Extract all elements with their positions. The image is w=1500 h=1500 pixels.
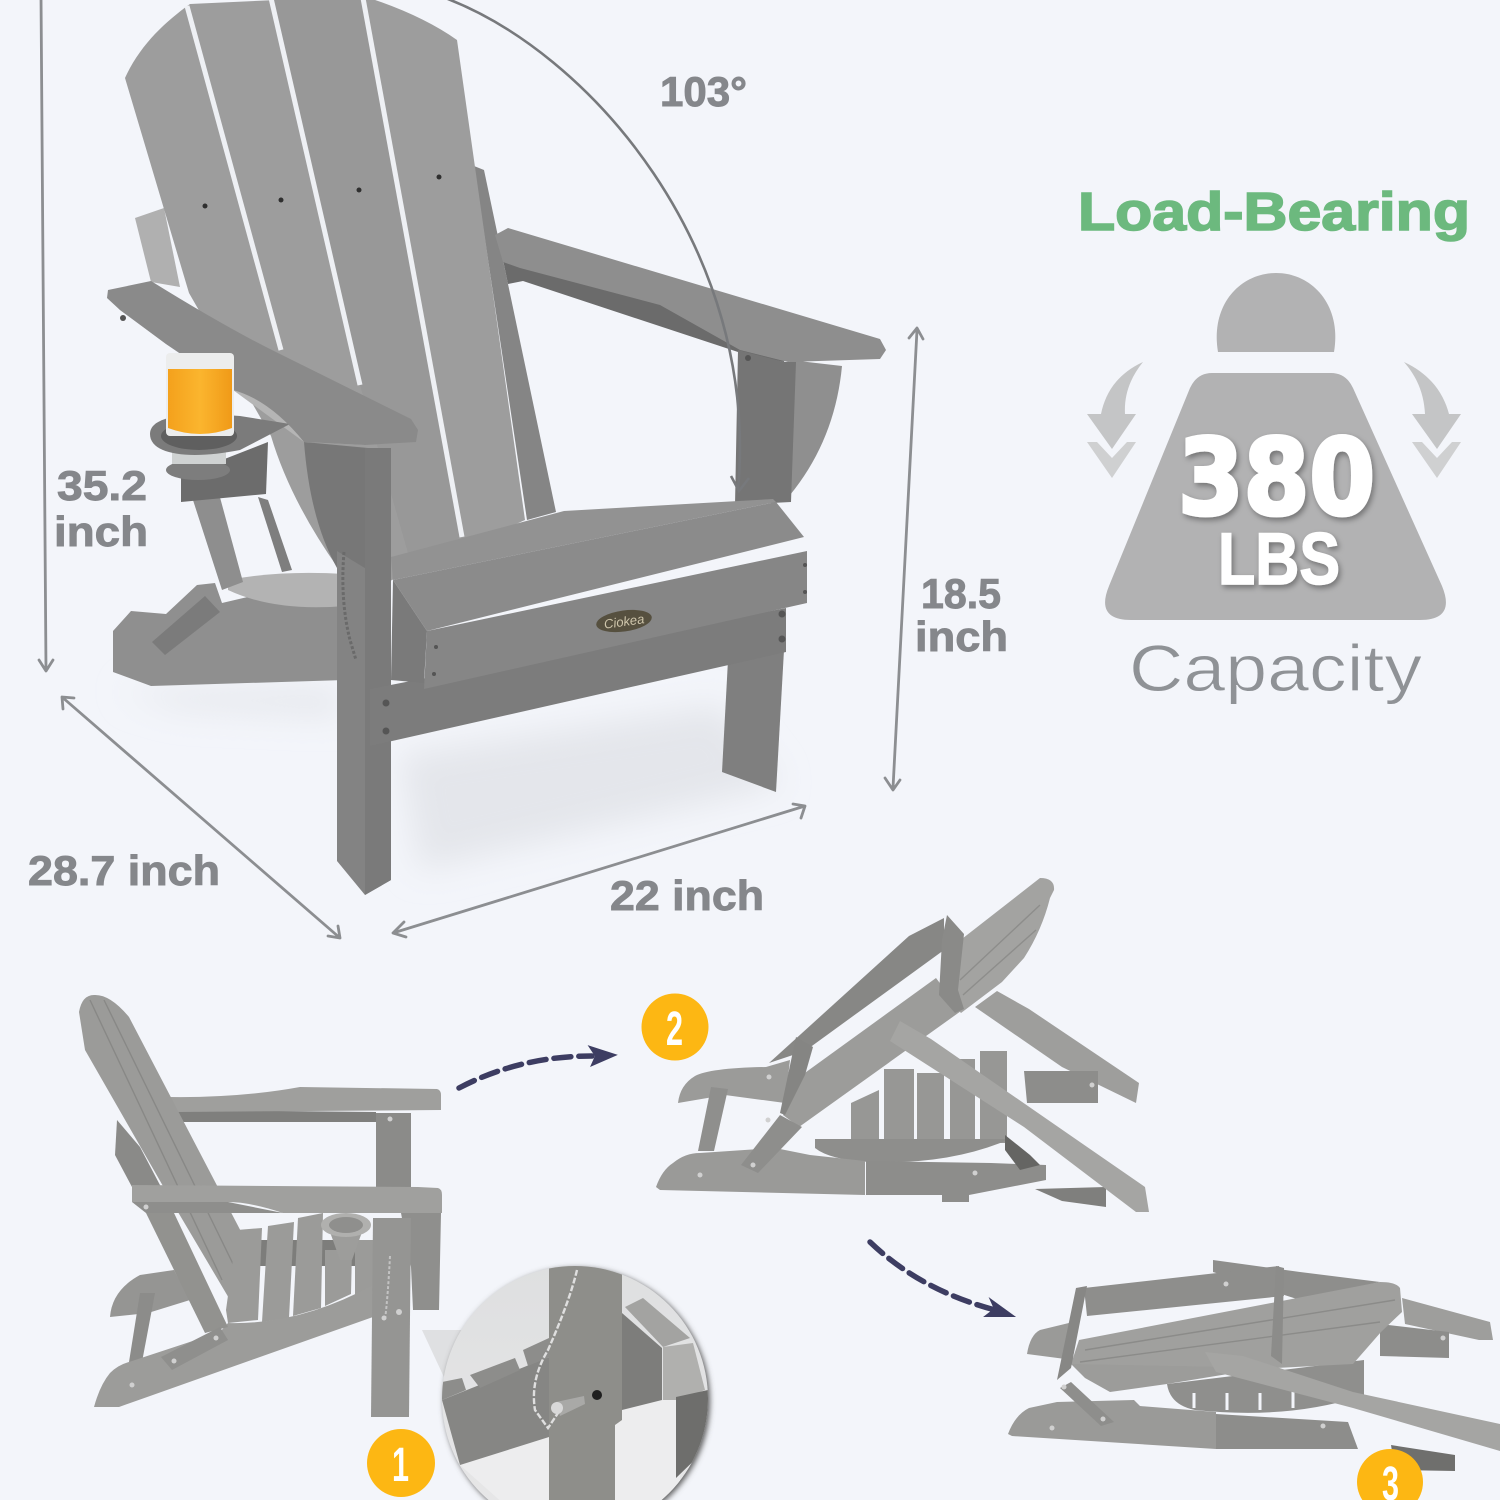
rear left arm block bbox=[135, 208, 180, 287]
runner bbox=[656, 1148, 865, 1195]
seat side bbox=[391, 580, 427, 683]
depth line bbox=[62, 697, 340, 938]
label: 103 degrees: 103° bbox=[660, 68, 747, 115]
label: 18.5 inch: 18.5 bbox=[921, 570, 1001, 617]
cup ring bbox=[321, 1213, 371, 1260]
unit: LBS: LBS bbox=[1218, 519, 1340, 600]
upright bbox=[939, 915, 964, 1013]
badge 2: 2 bbox=[666, 1003, 683, 1056]
badge 3 bbox=[1357, 1449, 1423, 1500]
inset seat rail bbox=[442, 1357, 549, 1465]
fold bracket bbox=[1005, 1135, 1040, 1170]
inset pointer bbox=[422, 1330, 480, 1390]
label: 35.2 inch: 35.2 bbox=[57, 462, 147, 509]
label: 22 inch: 22 inch bbox=[610, 872, 764, 919]
load-bearing panel bbox=[1078, 182, 1470, 705]
back lower band bbox=[1071, 1352, 1240, 1392]
front leg bbox=[337, 550, 391, 895]
far arm underside bbox=[176, 1110, 376, 1122]
left upright bbox=[1057, 1286, 1087, 1380]
frame back bbox=[1084, 1266, 1284, 1316]
runner connector bbox=[152, 596, 220, 655]
rear arc bbox=[678, 1060, 790, 1103]
slat backing bbox=[250, 1240, 370, 1266]
main chair photo bbox=[107, 0, 886, 895]
far arm bbox=[169, 1087, 441, 1112]
glass of juice bbox=[166, 353, 234, 436]
bolts bbox=[120, 315, 807, 734]
front leg bbox=[371, 1218, 411, 1417]
weight icon bbox=[1105, 273, 1446, 620]
near arm bbox=[1205, 1352, 1500, 1451]
dimension lines bbox=[39, 0, 923, 938]
backrest slat shading bbox=[272, 0, 462, 560]
back right frame bbox=[474, 166, 556, 520]
arm underside bbox=[132, 1202, 283, 1213]
step 2 chair bbox=[656, 878, 1149, 1212]
near arm bbox=[890, 1021, 1149, 1212]
back grooves bbox=[90, 1000, 236, 1280]
inset chain bbox=[534, 1270, 577, 1428]
connector bbox=[1060, 1382, 1114, 1426]
right rear post bbox=[735, 350, 796, 505]
left arm underside bbox=[110, 298, 365, 445]
heading: Load-Bearing: Load-Bearing bbox=[1078, 182, 1470, 242]
support behind back bbox=[115, 1120, 161, 1187]
width line bbox=[393, 804, 805, 937]
back slab lower bbox=[783, 978, 961, 1127]
rear strut bbox=[129, 1293, 155, 1362]
long rail bbox=[769, 918, 944, 1063]
inset right panel bbox=[622, 1313, 662, 1410]
cup holder bbox=[150, 414, 290, 502]
inset content bbox=[440, 1260, 720, 1500]
rear seat slats bbox=[228, 573, 345, 607]
rear struts bbox=[192, 490, 243, 590]
chain bbox=[385, 1256, 390, 1320]
curved front-left panel bbox=[304, 442, 368, 572]
connector bbox=[161, 1327, 228, 1370]
rear leg right bbox=[722, 650, 784, 792]
inset shadow bbox=[444, 1268, 710, 1500]
seat block bbox=[1216, 1414, 1358, 1449]
right down arrow bbox=[1404, 362, 1461, 478]
back slab bbox=[1071, 1282, 1402, 1368]
near arm bbox=[132, 1185, 442, 1213]
inset post bbox=[549, 1260, 622, 1500]
right arm top bbox=[495, 228, 886, 362]
back holes bbox=[202, 174, 442, 208]
lower rail bbox=[370, 608, 786, 746]
bottom right bbox=[1035, 1187, 1106, 1207]
lower side rail bbox=[94, 1285, 373, 1407]
inset front block bbox=[663, 1343, 705, 1400]
number: 380: 380 bbox=[1178, 417, 1375, 539]
rear runner bbox=[113, 574, 345, 686]
right block bbox=[1380, 1324, 1449, 1358]
right upright bbox=[1271, 1266, 1284, 1364]
far post bbox=[376, 1113, 411, 1190]
backrest bbox=[125, 0, 525, 590]
badge 1: 1 bbox=[392, 1439, 409, 1492]
angle arc bbox=[440, 0, 749, 491]
step 3 chair bbox=[1008, 1260, 1500, 1471]
seat apron bbox=[424, 551, 807, 689]
badge 1 bbox=[367, 1429, 435, 1497]
floor shadow bbox=[120, 690, 780, 870]
right arm underside bbox=[503, 252, 790, 362]
seat block bbox=[866, 1161, 1046, 1195]
front side block bbox=[401, 1213, 441, 1310]
label: 35.2 inch: inch bbox=[54, 508, 148, 555]
screws bbox=[698, 1074, 1094, 1178]
rear arc bbox=[110, 1270, 190, 1317]
inset far leg bbox=[676, 1390, 708, 1478]
word: Capacity: Capacity bbox=[1129, 631, 1422, 705]
runner bbox=[1008, 1400, 1216, 1449]
label: 18.5 inch: inch bbox=[915, 613, 1008, 660]
badge 2 bbox=[642, 994, 708, 1060]
far arm bbox=[975, 991, 1139, 1103]
Ciokea badge: Ciokea bbox=[603, 611, 645, 632]
seat slats bbox=[226, 1213, 373, 1323]
inset slats bbox=[442, 1338, 549, 1400]
screws bbox=[1050, 1282, 1446, 1430]
far arm bbox=[1402, 1298, 1493, 1340]
seat slats bbox=[851, 1051, 1007, 1153]
left arm top bbox=[107, 281, 418, 445]
back grooves bbox=[1080, 1300, 1395, 1362]
seat arc bbox=[815, 1139, 1010, 1162]
right rear block bbox=[1024, 1071, 1098, 1103]
seat top slats bbox=[391, 499, 776, 580]
back slab bbox=[79, 995, 247, 1305]
backrest gaps bbox=[187, 0, 462, 537]
arrow: step 2 to 3 bbox=[870, 1242, 1013, 1316]
left upright bbox=[780, 1037, 813, 1115]
Ciokea badge bbox=[595, 607, 653, 635]
arrow: step 1 to 2 bbox=[459, 1047, 615, 1088]
seat front flap bbox=[393, 502, 804, 631]
label: 28.7 inch: 28.7 inch bbox=[28, 847, 220, 894]
chain bbox=[343, 552, 356, 660]
slats under bbox=[1167, 1360, 1364, 1413]
step 1 chair bbox=[79, 995, 442, 1417]
right arm support arc bbox=[790, 360, 842, 495]
near back strut bbox=[146, 1213, 228, 1333]
back top bbox=[939, 878, 1054, 1013]
inset top flap bbox=[625, 1298, 690, 1347]
seat height line bbox=[885, 328, 923, 790]
left down arrow bbox=[1087, 362, 1143, 478]
screws bbox=[130, 1116, 402, 1388]
strut bbox=[698, 1087, 728, 1151]
inset pin bbox=[551, 1390, 602, 1416]
height line bbox=[39, 0, 53, 671]
connector bbox=[741, 1115, 802, 1173]
left arc bbox=[1027, 1322, 1073, 1360]
detail inset circle bbox=[422, 1260, 720, 1500]
back grooves bbox=[960, 905, 1040, 995]
top far bar bbox=[1213, 1260, 1380, 1300]
